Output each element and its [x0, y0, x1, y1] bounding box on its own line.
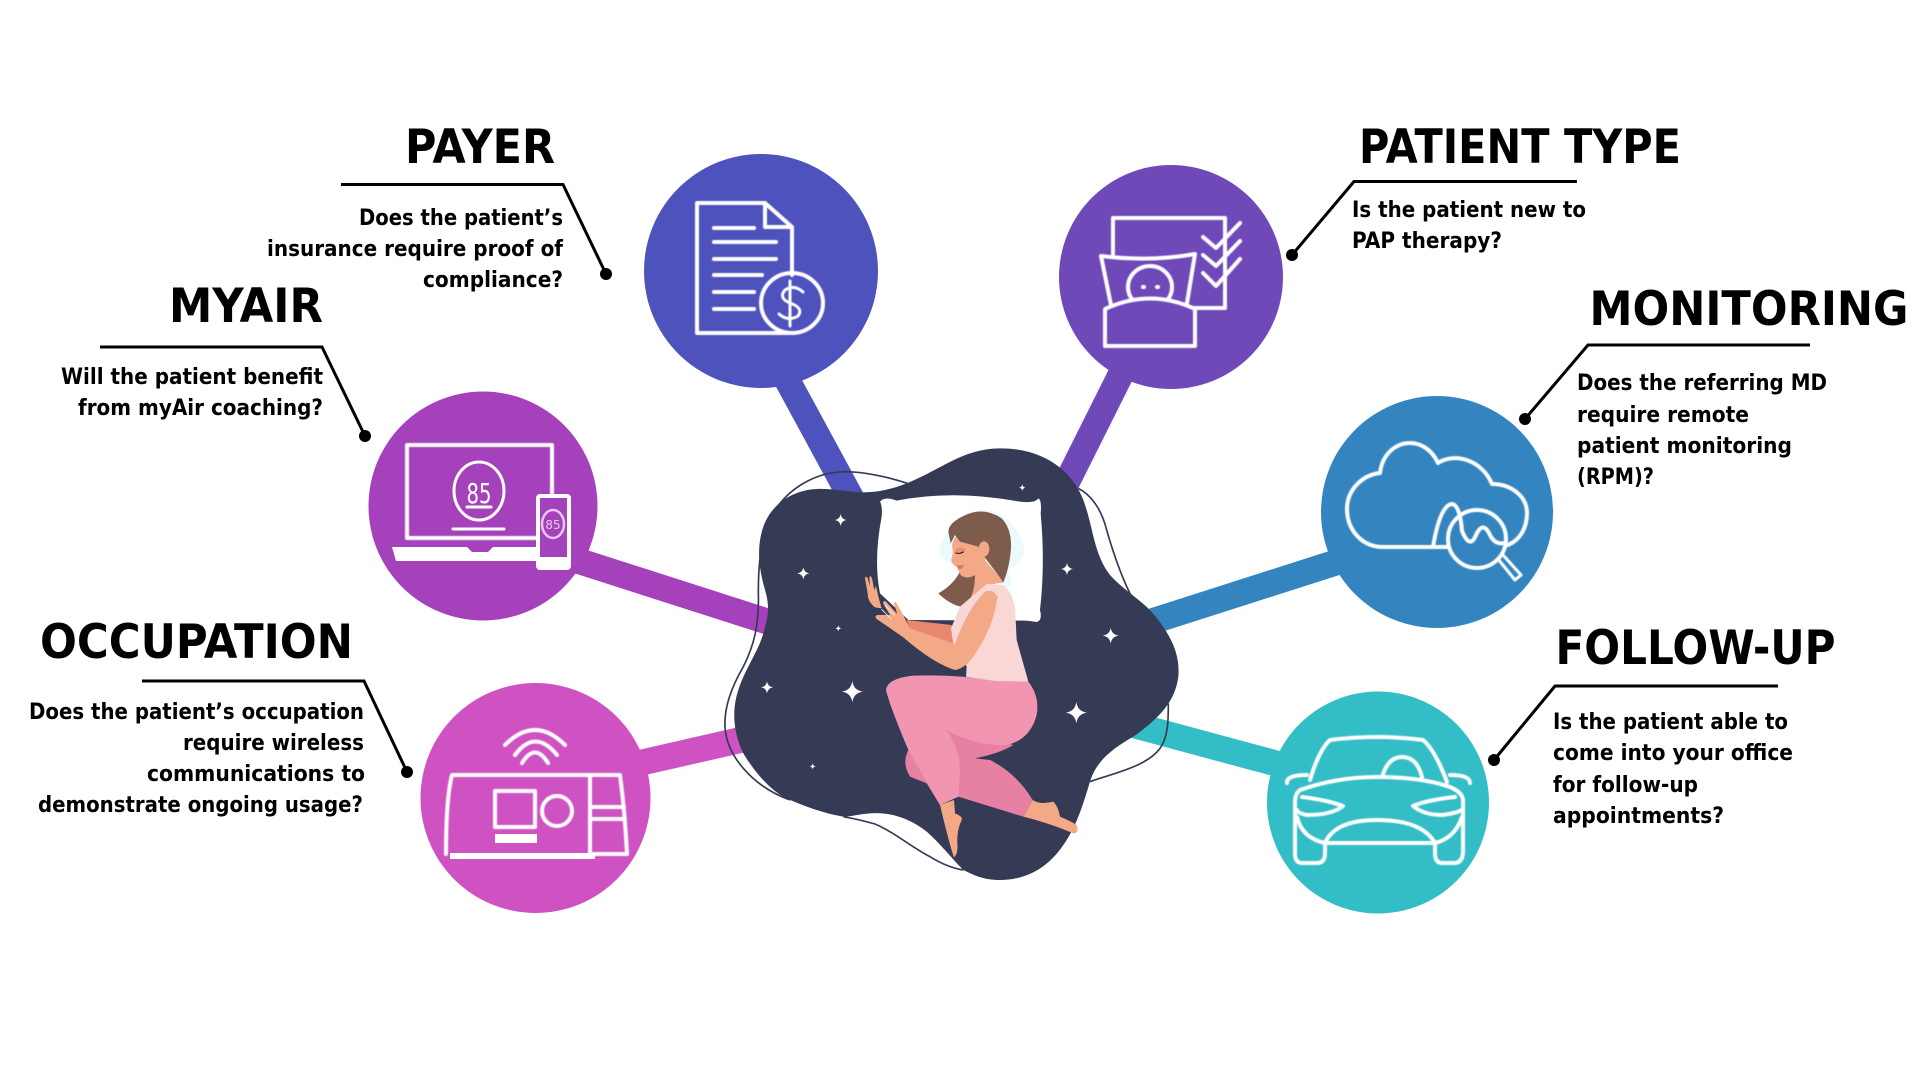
- near arm and hand: [875, 591, 998, 670]
- rear foot: [1023, 800, 1077, 833]
- patient type circle: [1059, 165, 1283, 389]
- facial features: [955, 548, 966, 569]
- question text: for follow-up: [1553, 773, 1698, 798]
- question text: [29, 700, 365, 818]
- occupation circle: [420, 683, 650, 913]
- stars: [761, 484, 1119, 769]
- hair lock: [938, 572, 975, 607]
- hair: [948, 512, 1011, 582]
- leader line: [341, 184, 606, 274]
- question text: patient monitoring: [1577, 434, 1792, 459]
- leader dot: [1286, 249, 1298, 261]
- leader line: [1525, 345, 1810, 419]
- shirt: [951, 584, 1028, 682]
- question text: PAP therapy?: [1352, 229, 1502, 254]
- icon: laptop and phone with score: 85: [545, 518, 561, 532]
- back arm: [907, 620, 954, 645]
- night-sky blob: [734, 448, 1179, 880]
- icon: laptop and phone with score: 85: [466, 477, 492, 510]
- leader line: [100, 347, 365, 436]
- heading: occupation: OCCUPATION: [40, 615, 353, 670]
- icon: wireless PAP device: [446, 730, 627, 859]
- connector stems: [560, 330, 1400, 778]
- icon: car front view: [1287, 737, 1470, 863]
- heading: follow-up: FOLLOW-UP: [1556, 621, 1836, 676]
- question text: require wireless: [183, 731, 364, 756]
- leader dot: [401, 766, 413, 778]
- neck and chest: [963, 560, 1004, 608]
- leader dot: [600, 268, 612, 280]
- question text: [1577, 371, 1827, 490]
- central illustration: sleeping woman on night-sky blob: [725, 448, 1179, 880]
- question text: Does the patient’s occupation: [29, 700, 364, 725]
- question text: from myAir coaching?: [78, 396, 323, 421]
- panel: payer: [267, 120, 878, 388]
- leader dot: [359, 430, 371, 442]
- question text: Will the patient benefit: [61, 365, 323, 390]
- panel: patient type: [1059, 120, 1681, 389]
- finger highlights: [882, 605, 894, 619]
- leader line: [142, 681, 407, 772]
- question text: communications to: [147, 762, 365, 787]
- question text: demonstrate ongoing usage?: [38, 793, 363, 818]
- question text: [61, 365, 323, 421]
- myAir circle: [368, 392, 598, 620]
- blob outline: [725, 472, 1168, 870]
- leader dot: [1488, 754, 1500, 766]
- question text: come into your office: [1553, 741, 1793, 766]
- ear: [979, 541, 989, 557]
- icon: laptop and phone with score: [392, 445, 569, 568]
- question text: [1352, 198, 1586, 254]
- question text: insurance require proof of: [267, 237, 563, 262]
- panel: occupation: [29, 615, 650, 913]
- question text: appointments?: [1553, 804, 1724, 829]
- heading: patient type: PATIENT TYPE: [1359, 120, 1681, 175]
- head glow: [939, 510, 1024, 588]
- monitoring circle: [1321, 396, 1553, 628]
- icon: document with dollar coin: [697, 203, 823, 333]
- question text: [267, 206, 563, 293]
- front foot: [940, 800, 962, 857]
- icon: patient in bed with checklist: [1101, 218, 1240, 346]
- question text: (RPM)?: [1577, 465, 1654, 490]
- question text: [1553, 710, 1793, 829]
- payer circle: [644, 154, 878, 388]
- panel: follow-up: [1267, 621, 1836, 914]
- question text: require remote: [1577, 403, 1749, 428]
- face: [951, 530, 988, 577]
- question text: Does the referring MD: [1577, 371, 1827, 396]
- leader dot: [1519, 413, 1531, 425]
- front leg and hip: [886, 675, 1037, 805]
- question text: Does the patient’s: [359, 206, 563, 231]
- icon: cloud with waveform magnifier: [1347, 443, 1527, 580]
- leader line: [1494, 686, 1778, 760]
- far hand: [865, 576, 882, 608]
- panel: monitoring: [1321, 282, 1908, 628]
- pillow: [877, 495, 1043, 622]
- question text: Is the patient able to: [1553, 710, 1788, 735]
- heading: myAir: MYAIR: [169, 279, 323, 334]
- darker rear leg: [905, 727, 1033, 817]
- heading: payer: PAYER: [405, 120, 555, 175]
- leader line: [1292, 182, 1577, 255]
- panel: myAir: [61, 279, 598, 620]
- question text: Is the patient new to: [1352, 198, 1586, 223]
- follow-up circle: [1267, 692, 1489, 914]
- question text: compliance?: [423, 268, 563, 293]
